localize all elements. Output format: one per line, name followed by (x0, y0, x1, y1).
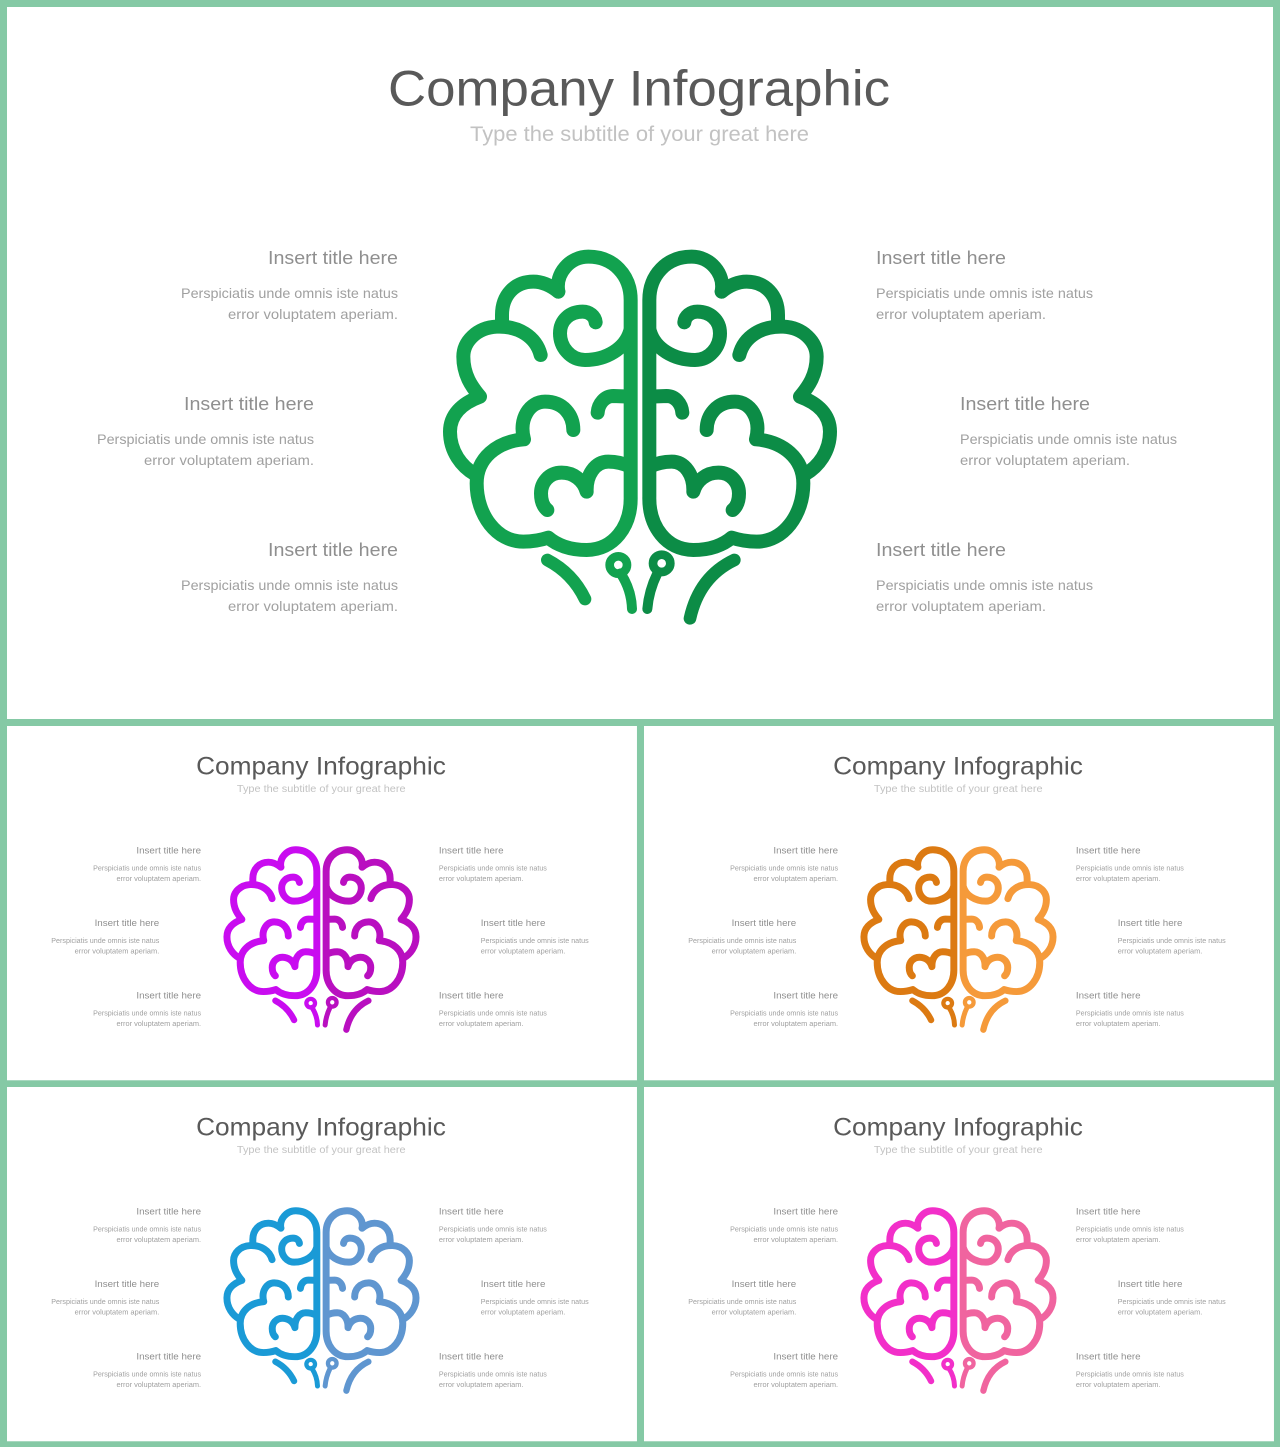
text blocks: orange slide: error voluptatem aperiam. (1076, 1021, 1161, 1028)
text blocks: purple slide: Insert title here (439, 991, 504, 1001)
icon: green brain (450, 257, 830, 618)
text block: left top: Insert title here (268, 247, 398, 268)
text block: left bottom: Insert title here (268, 539, 398, 560)
panel: pink slide (644, 1087, 1274, 1441)
text blocks: pink slide (688, 1206, 1226, 1389)
text block: right top: error voluptatem aperiam. (876, 306, 1046, 322)
text blocks: pink slide: error voluptatem aperiam. (1118, 1309, 1202, 1316)
text blocks: orange slide: Insert title here (1076, 991, 1141, 1001)
text blocks: purple slide: error voluptatem aperiam. (481, 948, 565, 955)
text blocks: purple slide: error voluptatem aperiam. (75, 948, 159, 955)
text block: left bottom: error voluptatem aperiam. (228, 598, 398, 614)
text blocks: pink slide: Insert title here (1076, 1206, 1141, 1216)
text blocks: blue slide (51, 1206, 589, 1389)
text blocks: orange slide: Insert title here (1118, 918, 1182, 928)
text blocks: pink slide: Perspiciatis unde omnis iste natus (730, 1226, 839, 1233)
text blocks: blue slide: error voluptatem aperiam. (116, 1237, 201, 1244)
text block: right top: Insert title here (876, 247, 1006, 268)
panel: main green slide (7, 7, 1273, 719)
text blocks: blue slide: Perspiciatis unde omnis iste natus (51, 1299, 160, 1306)
text blocks: pink slide: Perspiciatis unde omnis iste natus (1118, 1299, 1226, 1306)
text blocks: blue slide: error voluptatem aperiam. (481, 1309, 565, 1316)
text blocks: purple slide: error voluptatem aperiam. (116, 1021, 201, 1028)
text blocks: blue slide: error voluptatem aperiam. (439, 1382, 524, 1389)
text blocks: orange slide: Perspiciatis unde omnis iste natus (1118, 938, 1226, 945)
text blocks: blue slide: Perspiciatis unde omnis iste natus (439, 1372, 547, 1379)
text blocks: orange slide: Insert title here (1076, 845, 1141, 855)
subtitle: Type the subtitle of your great here (470, 123, 809, 146)
text blocks: purple slide: Perspiciatis unde omnis iste natus (481, 938, 589, 945)
heading: purple slide title: Company Infographic (196, 753, 446, 781)
text blocks: purple slide: Insert title here (95, 918, 159, 928)
text block: left middle: Perspiciatis unde omnis iste natus (97, 431, 314, 447)
subtitle: blue slide: Type the subtitle of your great here (237, 1145, 406, 1156)
text blocks: orange slide: Insert title here (773, 991, 838, 1001)
text blocks: purple slide: Insert title here (439, 845, 504, 855)
text blocks: pink slide: error voluptatem aperiam. (712, 1309, 796, 1316)
subtitle: orange slide: Type the subtitle of your great here (874, 784, 1043, 795)
text blocks: purple slide: Perspiciatis unde omnis iste natus (439, 865, 547, 872)
text blocks: blue slide: error voluptatem aperiam. (75, 1309, 159, 1316)
heading: main title: Company Infographic (388, 60, 890, 116)
text block: left top (181, 247, 398, 322)
text blocks: pink slide: Perspiciatis unde omnis iste natus (1076, 1372, 1184, 1379)
icon: pink brain (864, 1211, 1053, 1391)
text blocks: blue slide: Insert title here (95, 1279, 159, 1289)
icon: blue brain (227, 1211, 416, 1391)
icon: purple brain (227, 850, 416, 1030)
text blocks: pink slide: error voluptatem aperiam. (1076, 1237, 1161, 1244)
text block: right bottom (876, 539, 1093, 614)
text blocks: orange slide: error voluptatem aperiam. (712, 948, 796, 955)
text blocks: purple slide: error voluptatem aperiam. (439, 876, 524, 883)
text blocks: orange slide: error voluptatem aperiam. (1076, 876, 1161, 883)
text blocks: purple slide: Insert title here (136, 991, 201, 1001)
text blocks: orange slide: Insert title here (732, 918, 796, 928)
text blocks: pink slide: Perspiciatis unde omnis iste natus (1076, 1226, 1184, 1233)
text block: left bottom (181, 539, 398, 614)
text block: right middle (960, 393, 1177, 468)
text blocks: purple slide: Perspiciatis unde omnis iste natus (93, 865, 202, 872)
text block: left middle (97, 393, 314, 468)
text blocks: blue slide: Perspiciatis unde omnis iste natus (481, 1299, 589, 1306)
text block: left top: Perspiciatis unde omnis iste natus (181, 285, 398, 301)
text blocks: orange slide: Perspiciatis unde omnis iste natus (730, 1011, 839, 1018)
text blocks: orange slide: error voluptatem aperiam. (1118, 948, 1202, 955)
text blocks: orange slide: Perspiciatis unde omnis iste natus (1076, 1011, 1184, 1018)
text blocks: pink slide: Perspiciatis unde omnis iste natus (730, 1372, 839, 1379)
text block: right top (876, 247, 1093, 322)
text blocks: pink slide: error voluptatem aperiam. (753, 1382, 838, 1389)
text blocks: pink slide: error voluptatem aperiam. (753, 1237, 838, 1244)
text block: right bottom: Insert title here (876, 539, 1006, 560)
text block: right bottom: Perspiciatis unde omnis iste natus (876, 577, 1093, 593)
panel: blue slide (7, 1087, 637, 1441)
text blocks: orange slide: error voluptatem aperiam. (753, 1021, 838, 1028)
text blocks: orange slide: Perspiciatis unde omnis iste natus (730, 865, 839, 872)
text block: right top: Perspiciatis unde omnis iste natus (876, 285, 1093, 301)
text blocks: blue slide: Perspiciatis unde omnis iste natus (439, 1226, 547, 1233)
heading: orange slide title: Company Infographic (833, 753, 1083, 781)
text block: right middle: Perspiciatis unde omnis iste natus (960, 431, 1177, 447)
heading: pink slide title: Company Infographic (833, 1114, 1083, 1142)
text blocks: pink slide: Insert title here (732, 1279, 796, 1289)
text blocks: pink slide: Perspiciatis unde omnis iste natus (688, 1299, 797, 1306)
text blocks: orange slide: Insert title here (773, 845, 838, 855)
text blocks: orange slide (688, 845, 1226, 1028)
panel: purple slide (7, 726, 637, 1080)
heading: blue slide title: Company Infographic (196, 1114, 446, 1142)
text block: left middle: Insert title here (184, 393, 314, 414)
text blocks: blue slide: Insert title here (481, 1279, 545, 1289)
text blocks: pink slide: Insert title here (1118, 1279, 1182, 1289)
text block: left top: error voluptatem aperiam. (228, 306, 398, 322)
text blocks: blue slide: Insert title here (439, 1352, 504, 1362)
text blocks: orange slide: Perspiciatis unde omnis iste natus (1076, 865, 1184, 872)
text block: right middle: Insert title here (960, 393, 1090, 414)
text blocks: blue slide: error voluptatem aperiam. (439, 1237, 524, 1244)
text blocks: blue slide: Insert title here (439, 1206, 504, 1216)
text blocks: blue slide: Insert title here (136, 1206, 201, 1216)
text block: right bottom: error voluptatem aperiam. (876, 598, 1046, 614)
text blocks: purple slide (51, 845, 589, 1028)
text blocks: blue slide: Insert title here (136, 1352, 201, 1362)
text block: right middle: error voluptatem aperiam. (960, 452, 1130, 468)
panel: orange slide (644, 726, 1274, 1080)
text blocks: blue slide: Perspiciatis unde omnis iste natus (93, 1372, 202, 1379)
text blocks: pink slide: Insert title here (773, 1352, 838, 1362)
text block: left bottom: Perspiciatis unde omnis iste natus (181, 577, 398, 593)
text blocks: purple slide: Perspiciatis unde omnis iste natus (51, 938, 160, 945)
text blocks: purple slide: error voluptatem aperiam. (116, 876, 201, 883)
icon: orange brain (864, 850, 1053, 1030)
text blocks: pink slide: Insert title here (773, 1206, 838, 1216)
subtitle: purple slide: Type the subtitle of your great here (237, 784, 406, 795)
text blocks: blue slide: error voluptatem aperiam. (116, 1382, 201, 1389)
text block: left middle: error voluptatem aperiam. (144, 452, 314, 468)
text blocks: orange slide: error voluptatem aperiam. (753, 876, 838, 883)
text blocks: pink slide: Insert title here (1076, 1352, 1141, 1362)
subtitle: pink slide: Type the subtitle of your great here (874, 1145, 1043, 1156)
text blocks: pink slide: error voluptatem aperiam. (1076, 1382, 1161, 1389)
text blocks: purple slide: Perspiciatis unde omnis iste natus (439, 1011, 547, 1018)
text blocks: purple slide: error voluptatem aperiam. (439, 1021, 524, 1028)
text blocks: purple slide: Insert title here (481, 918, 545, 928)
text blocks: purple slide: Perspiciatis unde omnis iste natus (93, 1011, 202, 1018)
text blocks: orange slide: Perspiciatis unde omnis iste natus (688, 938, 797, 945)
text blocks: purple slide: Insert title here (136, 845, 201, 855)
text blocks: blue slide: Perspiciatis unde omnis iste natus (93, 1226, 202, 1233)
